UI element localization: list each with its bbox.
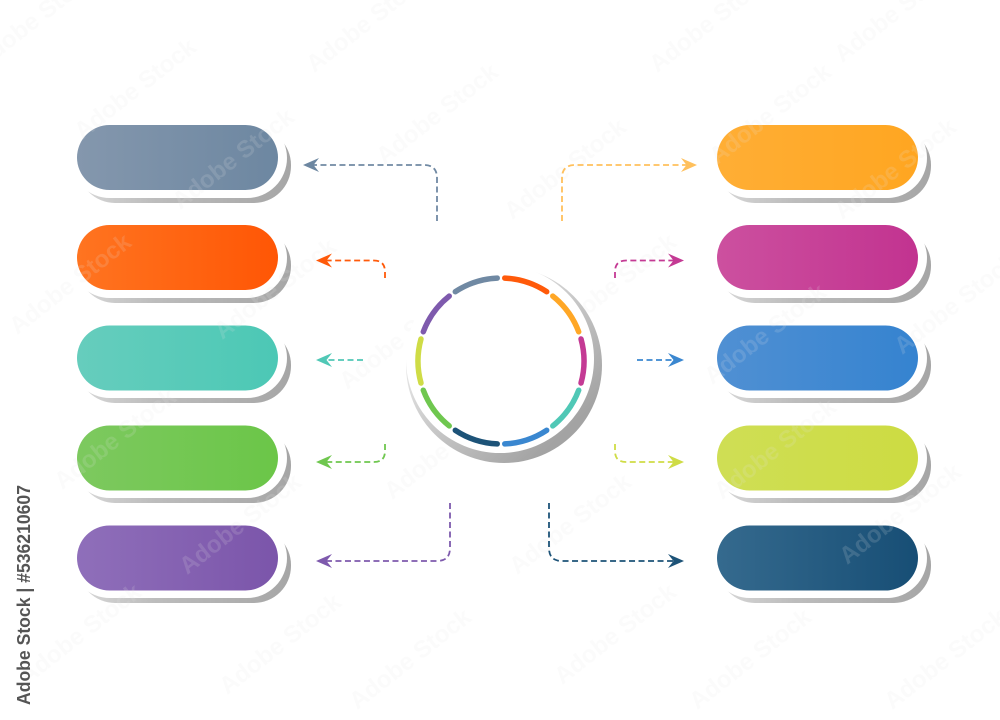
right pill 4: lime bbox=[710, 418, 931, 503]
right pill 1: amber bbox=[710, 118, 931, 203]
arrow: right 2 bbox=[615, 254, 684, 278]
arrow: right 4 bbox=[615, 444, 684, 469]
watermark pattern: Adobe Stock bbox=[499, 113, 632, 225]
watermark pattern: Adobe Stock bbox=[709, 393, 842, 505]
stock id side label: Adobe Stock | #536210607 bbox=[14, 485, 34, 705]
watermark pattern: Adobe Stock bbox=[209, 233, 342, 345]
watermark pattern: Adobe Stock bbox=[371, 58, 504, 170]
watermark pattern: Adobe Stock bbox=[49, 383, 182, 495]
arrow: left 5 bbox=[316, 503, 450, 568]
watermark pattern: Adobe Stock bbox=[549, 578, 682, 690]
watermark pattern: Adobe Stock bbox=[704, 58, 837, 170]
watermark pattern: Adobe Stock bbox=[504, 468, 637, 580]
left pill 2: orange bbox=[70, 218, 291, 303]
watermark pattern: Adobe Stock bbox=[14, 578, 147, 690]
watermark pattern: Adobe Stock bbox=[174, 468, 307, 580]
arrow: right 3 bbox=[637, 353, 684, 367]
arrow: right 5 bbox=[549, 503, 684, 568]
watermark pattern: Adobe Stock bbox=[684, 603, 817, 715]
left pill 5: purple bbox=[70, 518, 291, 603]
arrow: left 4 bbox=[316, 444, 385, 469]
watermark pattern: Adobe Stock bbox=[699, 278, 832, 390]
watermark pattern: Adobe Stock bbox=[834, 458, 967, 570]
watermark pattern: Adobe Stock bbox=[4, 228, 137, 340]
right pill 5: navy bbox=[710, 518, 931, 603]
watermark pattern: Adobe Stock bbox=[829, 113, 962, 225]
watermark pattern: Adobe Stock bbox=[214, 588, 347, 700]
arrow: right 1 bbox=[562, 158, 697, 221]
watermark pattern: Adobe Stock bbox=[344, 603, 477, 715]
arrow: left 1 bbox=[303, 158, 437, 221]
watermark pattern: Adobe Stock bbox=[379, 393, 512, 505]
left pill 3: teal bbox=[70, 318, 291, 403]
watermark pattern: Adobe Stock bbox=[334, 283, 467, 395]
left pill 4: green bbox=[70, 418, 291, 503]
arrow: left 3 bbox=[316, 353, 363, 367]
watermark pattern: Adobe Stock bbox=[167, 103, 300, 215]
right pill 3: blue bbox=[710, 318, 931, 403]
central ring bbox=[406, 265, 602, 463]
left pill 1: slate bbox=[70, 118, 291, 203]
watermark pattern: Adobe Stock bbox=[69, 33, 202, 145]
arrow: left 2 bbox=[316, 254, 385, 278]
watermark pattern: Adobe Stock bbox=[549, 228, 682, 340]
right pill 2: magenta bbox=[710, 218, 931, 303]
